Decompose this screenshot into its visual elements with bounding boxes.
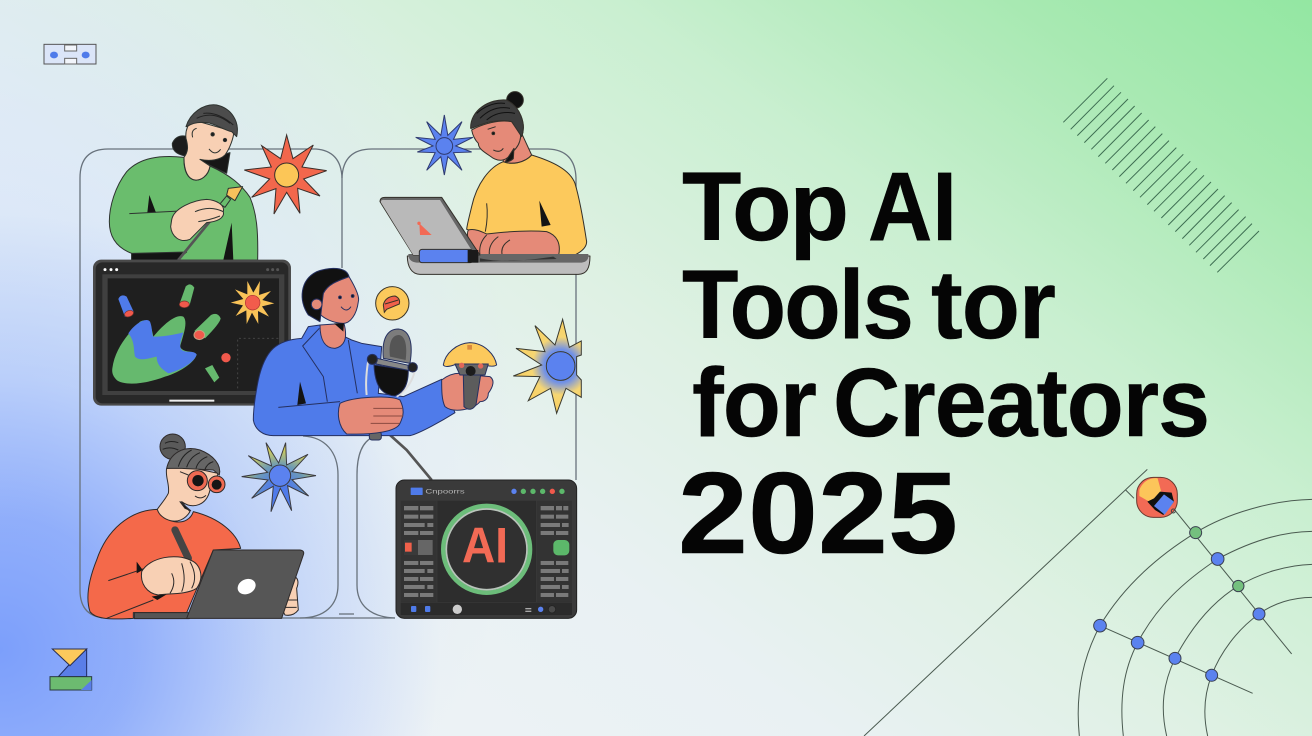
person: yellow sweater at laptop bbox=[380, 92, 590, 274]
microphone bbox=[366, 329, 417, 440]
title heading: 2025 bbox=[678, 448, 958, 578]
diagonal hatch lines bbox=[1063, 78, 1259, 272]
top-left logo icon bbox=[44, 44, 96, 64]
right control bars bbox=[541, 506, 569, 597]
AI ring and label: AI bbox=[462, 518, 508, 574]
app footer bbox=[401, 603, 572, 615]
title heading: for bbox=[692, 348, 816, 457]
panel frame lines bbox=[80, 149, 576, 618]
controller with yellow cap bbox=[443, 343, 497, 409]
title heading: Tools bbox=[682, 250, 912, 359]
multicolour starburst bbox=[242, 443, 316, 512]
title heading: Top bbox=[682, 152, 847, 261]
tablet painting: blob bbox=[112, 316, 197, 384]
yellow and blue starburst bbox=[513, 319, 581, 413]
title heading: tor bbox=[931, 250, 1055, 359]
app header: Cnpoorrs bbox=[425, 489, 466, 496]
person: green sweater with brush bbox=[109, 105, 258, 260]
AI app panel bbox=[396, 480, 577, 618]
app header bbox=[411, 488, 565, 496]
yellow badge icon bbox=[376, 287, 409, 320]
bottom-left logo icon bbox=[50, 649, 92, 690]
network nodes bbox=[1094, 527, 1265, 681]
tablet painting: sun bbox=[231, 281, 274, 324]
orange starburst bbox=[244, 135, 327, 214]
multicolour node badge bbox=[1137, 477, 1177, 517]
network diagram bbox=[864, 469, 1312, 736]
title heading: AI bbox=[868, 152, 957, 261]
left control bars bbox=[404, 506, 433, 597]
network lines bbox=[864, 469, 1312, 736]
drawing tablet bbox=[93, 260, 291, 406]
person: red sweater with sunglasses bbox=[88, 434, 304, 619]
AI ring and label bbox=[443, 506, 530, 593]
person: blue jacket with microphone bbox=[253, 268, 497, 480]
title heading: Creators bbox=[833, 348, 1209, 457]
title heading bbox=[678, 152, 1209, 578]
blue starburst bbox=[416, 115, 473, 175]
tablet painting: capsules and shapes bbox=[118, 284, 279, 388]
